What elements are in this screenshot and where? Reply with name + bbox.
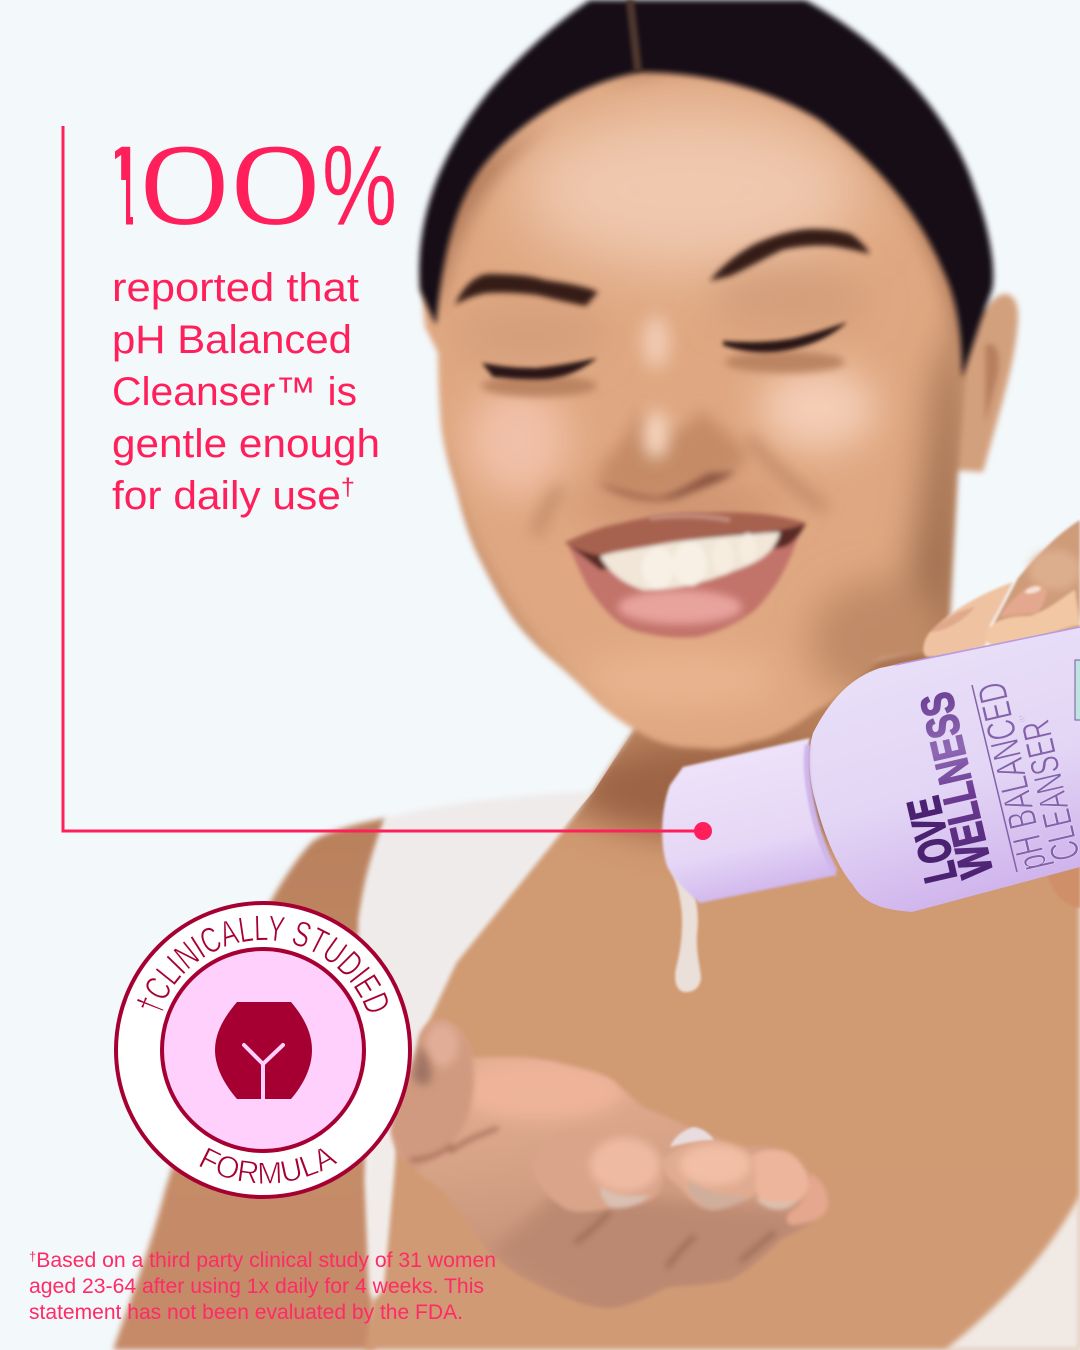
- base crease: [410, 1128, 498, 1160]
- right edge shade: [890, 323, 968, 633]
- hair parting: [626, 0, 642, 72]
- main statement: reported that: [112, 266, 359, 310]
- footnote: statement has not been evaluated by the FDA.: [29, 1301, 463, 1324]
- chest and neck: [365, 640, 1080, 1350]
- liquid in palm: [670, 1127, 714, 1147]
- bottle body: [809, 627, 1080, 912]
- face: [415, 30, 985, 760]
- eye socket shade left: [486, 318, 574, 352]
- left jaw shade: [461, 504, 552, 657]
- bottle label: teal panel: [1075, 660, 1080, 720]
- main statement: †: [341, 474, 355, 501]
- back of hand highlight: [1029, 550, 1080, 590]
- main statement: pH Balanced: [112, 318, 352, 362]
- bottle: [662, 627, 1080, 912]
- little finger: [787, 1173, 828, 1225]
- main statement: Cleanser™ is: [112, 370, 357, 414]
- badge outer ring: [116, 903, 410, 1197]
- badge: clinically studied formula: [114, 901, 412, 1199]
- badge text bottom: FORMULA: [200, 1148, 338, 1184]
- index finger: [923, 582, 1013, 657]
- index nail: [600, 1187, 650, 1208]
- big number 100%: 1: [92, 123, 155, 250]
- finger creases: [575, 1212, 775, 1268]
- badge inner circle: [162, 949, 364, 1151]
- eye right closed: [723, 322, 847, 373]
- eyebrows: [455, 229, 870, 306]
- big number 100%: 0: [228, 123, 323, 250]
- hairline shade: [440, 71, 959, 346]
- badge text top: †CLINICALLY STUDIED: [137, 916, 388, 1012]
- callout dot: [694, 822, 712, 840]
- teeth: [600, 532, 780, 590]
- upper lip: [564, 512, 806, 555]
- thumb pad: [985, 590, 1080, 647]
- footnote: aged 23-64 after using 1x daily for 4 weeks. This: [29, 1275, 484, 1298]
- ring finger: [753, 1150, 809, 1204]
- mouth dark corners: [566, 520, 806, 570]
- ring nail: [755, 1198, 798, 1210]
- footnote: Based on a third party clinical study of 31 women: [36, 1249, 496, 1272]
- mouth: [564, 512, 806, 638]
- forehead highlight: [520, 110, 860, 270]
- left cheek highlight: [468, 385, 568, 495]
- open hand: [388, 1019, 830, 1308]
- index finger: [533, 1128, 663, 1212]
- nail highlight: [1024, 585, 1042, 595]
- index nail: [930, 607, 975, 632]
- hair: [419, 0, 993, 378]
- thumb tip highlight: [425, 1023, 459, 1067]
- smile lines: [537, 437, 826, 535]
- bottle divider line: [972, 685, 1017, 872]
- main statement: [112, 266, 380, 518]
- bottle text: pH BALANCED: pH BALANCED: [970, 678, 1056, 875]
- bottle top edge: [895, 627, 1080, 665]
- big number 100%: 0: [137, 123, 232, 250]
- back of hand: [985, 520, 1080, 650]
- callout line: [63, 126, 703, 831]
- big number 100%: %: [322, 123, 397, 250]
- middle finger: [662, 1140, 761, 1210]
- badge icon: pelvis: [215, 1002, 312, 1099]
- thumb: [390, 1020, 474, 1175]
- middle fingertip: [680, 1145, 750, 1185]
- neck shadow: [570, 740, 910, 840]
- bottle logo: WELLNESS: WELLNESS: [910, 688, 1003, 882]
- bottle text: CLEANSER: ™: [1016, 712, 1033, 725]
- footnote: †: [29, 1249, 36, 1264]
- eye left closed: [481, 358, 597, 397]
- bottle logo: LOVE: LOVE: [897, 792, 967, 887]
- lower palm shade: [502, 1199, 794, 1273]
- mouth soft blur highlight: [650, 516, 730, 520]
- main statement: gentle enough: [112, 422, 380, 466]
- upper fingers: [923, 520, 1080, 657]
- right cheek highlight: [760, 366, 876, 450]
- middle nail: [689, 1180, 750, 1209]
- nose: [597, 316, 748, 500]
- thumb nail: [1000, 585, 1047, 617]
- index fingertip: [590, 1138, 660, 1192]
- lower lip highlight: [618, 590, 742, 624]
- mouth surround shade: [584, 482, 776, 524]
- eye socket shade right: [722, 260, 842, 319]
- lower right jaw: [810, 580, 950, 700]
- liquid drip: [668, 862, 701, 992]
- left arm: [113, 818, 386, 1350]
- bottle neck ring: [807, 745, 835, 872]
- thumb nail shade: [412, 1045, 431, 1085]
- palm highlight: [473, 1062, 622, 1122]
- ear: [950, 294, 1018, 472]
- chin highlight: [608, 660, 752, 700]
- lower lip: [568, 530, 800, 638]
- main statement: for daily use: [112, 474, 328, 518]
- white top: [355, 791, 1080, 1350]
- big number 100%: [115, 123, 397, 250]
- footnote: [29, 1249, 496, 1324]
- lower thumb: [1047, 866, 1080, 908]
- bottle cap: [662, 738, 837, 903]
